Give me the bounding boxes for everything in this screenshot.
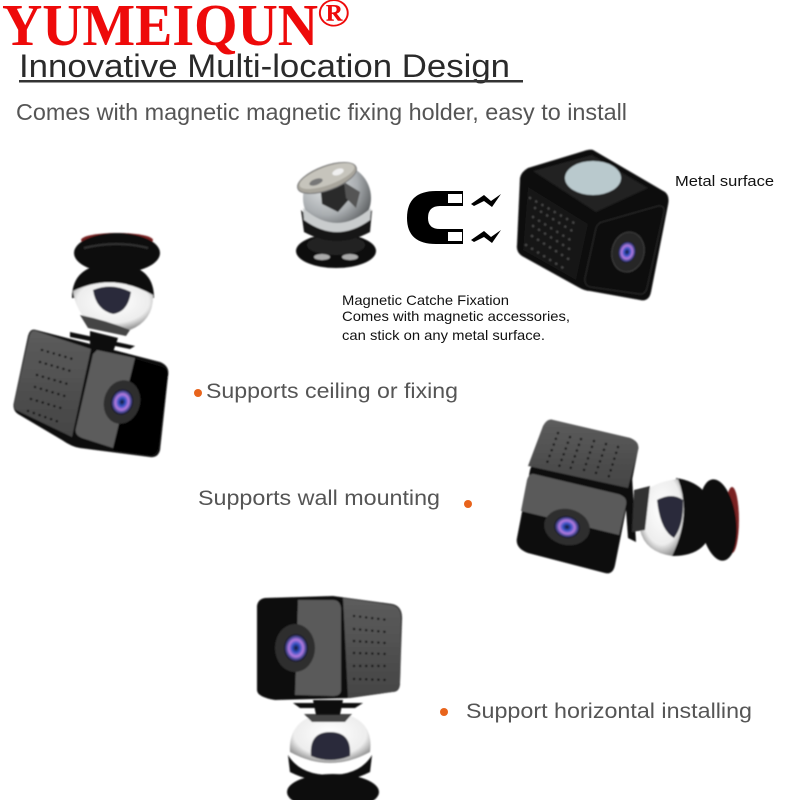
subheading: Comes with magnetic magnetic fixing holder, easy to install — [16, 99, 627, 125]
icon: magnetic mount — [294, 156, 376, 268]
camera: ceiling mount — [14, 233, 168, 457]
camera: horizontal mount — [257, 596, 402, 800]
icon: attraction arrows — [471, 194, 501, 243]
label and bullet: wall: Supports wall mounting — [198, 486, 440, 510]
text block: magnetic catch fixation: Magnetic Catche Fixation — [342, 292, 509, 308]
text block: magnetic catch fixation: Comes with magnetic accessories, — [342, 308, 570, 324]
text block: magnetic catch fixation: can stick on any metal surface. — [342, 327, 545, 343]
heading: Innovative Multi-location Design — [19, 48, 510, 84]
text block: magnetic catch fixation — [342, 292, 570, 343]
camera: top view with metal plate — [517, 150, 669, 300]
camera: wall mount — [517, 420, 742, 573]
bullet and label: horizontal: Support horizontal installing — [466, 699, 752, 723]
icon: horseshoe magnet — [407, 191, 463, 244]
label: metal surface: Metal surface — [675, 174, 774, 190]
bullet and label: ceiling: Supports ceiling or fixing — [206, 379, 458, 403]
